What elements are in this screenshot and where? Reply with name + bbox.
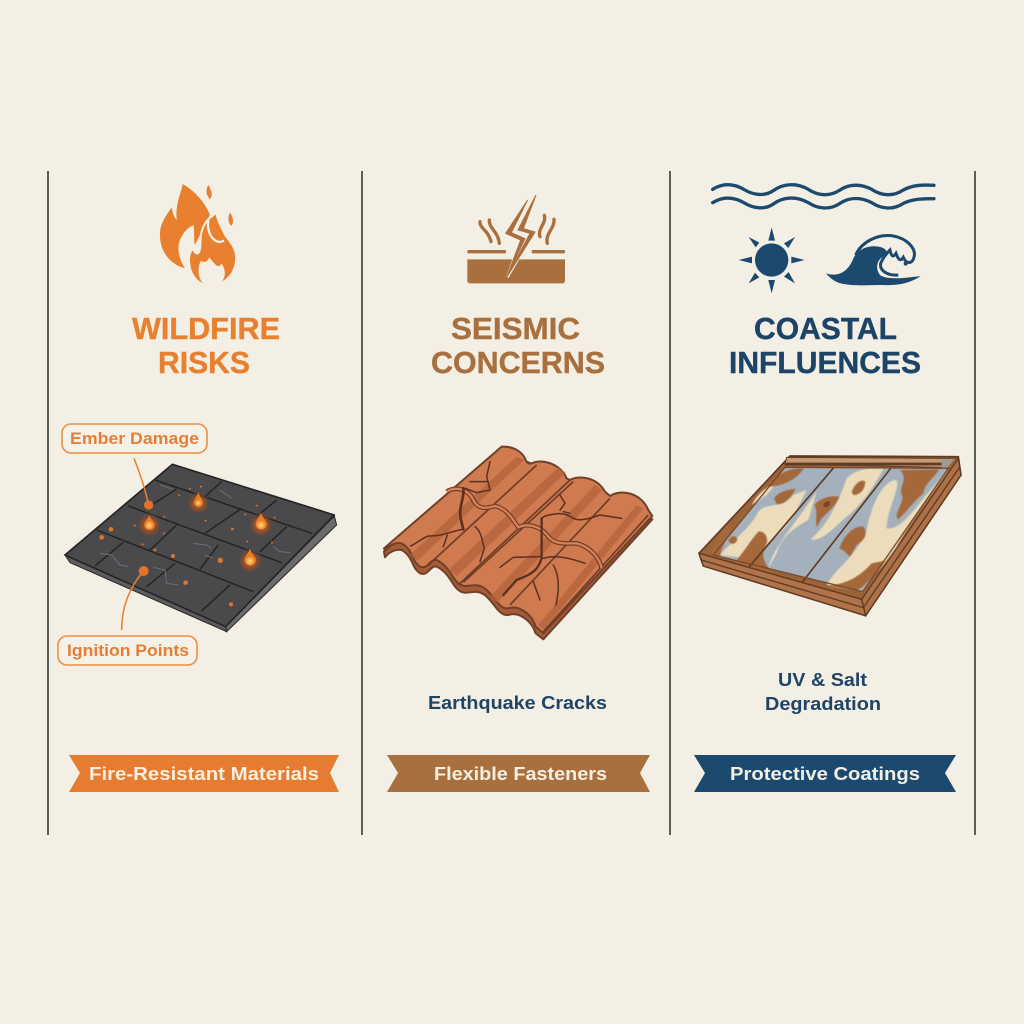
banner: flexible fasteners: Flexible Fasteners — [434, 763, 607, 784]
heading: seismic concerns — [431, 311, 605, 380]
caption: uv and salt degradation: Degradation — [765, 693, 881, 714]
panel: coastal influences — [694, 185, 961, 792]
heading: wildfire risks: RISKS — [158, 345, 250, 380]
heading: wildfire risks — [132, 311, 280, 380]
icon: ember flames — [136, 491, 274, 574]
heading: coastal influences: INFLUENCES — [729, 345, 921, 380]
banner: fire-resistant materials: Fire-Resistant Materials — [89, 763, 319, 784]
icon: sun — [739, 227, 805, 293]
leader: ignition points — [122, 571, 144, 630]
callout: ember damage: Ember Damage — [70, 429, 199, 448]
illustration: cracked clay tiles — [384, 447, 652, 639]
banner: fire-resistant materials — [69, 755, 339, 792]
corrosion patches — [720, 468, 948, 590]
overlap course — [447, 489, 602, 568]
panel: seismic concerns — [384, 195, 652, 792]
heading: seismic concerns: CONCERNS — [431, 345, 605, 380]
caption: earthquake cracks: Earthquake Cracks — [428, 692, 607, 713]
heading: wildfire risks: WILDFIRE — [132, 311, 280, 346]
icon: flame — [160, 184, 236, 285]
heading: seismic concerns: SEISMIC — [451, 311, 580, 346]
cracks — [411, 462, 622, 605]
icon: waves — [713, 185, 934, 208]
banner: protective coatings: Protective Coatings — [730, 763, 920, 784]
icon: ocean wave — [826, 235, 921, 285]
caption: uv and salt degradation: UV & Salt — [778, 669, 867, 690]
callout: ember damage — [62, 424, 207, 453]
leader: ember damage — [134, 458, 149, 505]
banner: flexible fasteners — [387, 755, 650, 792]
callout: ignition points: Ignition Points — [67, 641, 189, 660]
caption: uv and salt degradation — [765, 669, 881, 714]
callout: ignition points — [58, 636, 197, 665]
heading: coastal influences — [729, 311, 921, 380]
icon: seismic crack — [467, 195, 565, 283]
panel: wildfire risks — [58, 184, 339, 792]
illustration: corroded metal roof — [699, 456, 961, 616]
heading: coastal influences: COASTAL — [754, 311, 897, 346]
illustration: charred shingle roof — [65, 458, 337, 632]
banner: protective coatings — [694, 755, 956, 792]
